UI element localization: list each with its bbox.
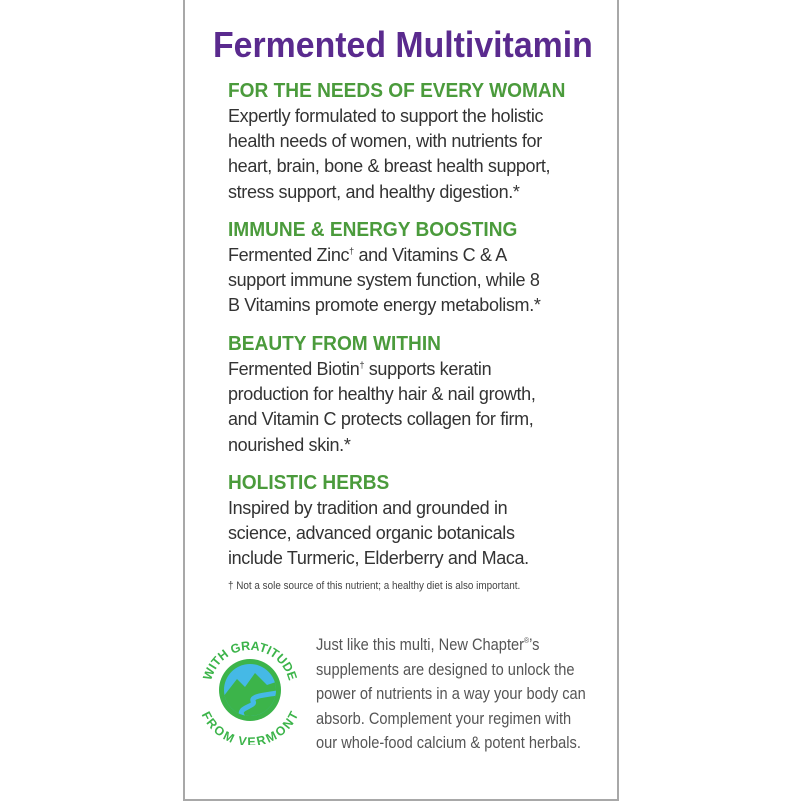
text: closing paragraph: Just like this multi, New Chapter®’s <box>316 635 539 654</box>
heading: herbs: HOLISTIC HERBS <box>228 472 389 494</box>
text: herbs: include Turmeric, Elderberry and Maca. <box>228 548 529 568</box>
text: needs: heart, brain, bone & breast health support, <box>228 156 550 176</box>
text: beauty <box>228 359 535 455</box>
footnote: † Not a sole source of this nutrient; a healthy diet is also important. <box>228 580 520 592</box>
text: closing paragraph: power of nutrients in a way your body can <box>316 684 586 703</box>
text: beauty: and Vitamin C protects collagen for firm, <box>228 409 533 429</box>
text: herbs: science, advanced organic botanicals <box>228 523 515 543</box>
heading: immune: IMMUNE & ENERGY BOOSTING <box>228 219 517 241</box>
text: immune: Fermented Zinc† and Vitamins C & A <box>228 245 507 265</box>
text: needs <box>228 106 550 202</box>
heading: needs of every woman: FOR THE NEEDS OF EVERY WOMAN <box>228 80 565 102</box>
text: beauty: nourished skin.* <box>228 435 350 455</box>
text: closing paragraph: absorb. Complement your regimen with <box>316 708 571 728</box>
text: beauty: Fermented Biotin† supports keratin <box>228 359 491 379</box>
heading: beauty: BEAUTY FROM WITHIN <box>228 333 441 355</box>
icon: gratitude badge: WITH GRATITUDE <box>202 642 297 680</box>
text: immune: support immune system function, while 8 <box>228 270 540 290</box>
panel <box>183 0 619 801</box>
text: closing paragraph: supplements are designed to unlock the <box>316 660 574 678</box>
text: herbs <box>228 498 529 568</box>
text: needs: health needs of women, with nutrients for <box>228 131 542 151</box>
text: closing paragraph <box>316 635 586 752</box>
text: immune <box>228 245 541 315</box>
text: needs: Expertly formulated to support the holistic <box>228 106 543 126</box>
icon: gratitude badge <box>202 642 298 745</box>
text: needs: stress support, and healthy digestion.* <box>228 182 520 202</box>
title: Fermented Multivitamin <box>213 24 593 65</box>
text: closing paragraph: our whole-food calcium & potent herbals. <box>316 733 581 752</box>
text: herbs: Inspired by tradition and grounded in <box>228 498 507 518</box>
text: beauty: production for healthy hair & nail growth, <box>228 384 535 404</box>
text: immune: B Vitamins promote energy metabolism.* <box>228 295 541 315</box>
